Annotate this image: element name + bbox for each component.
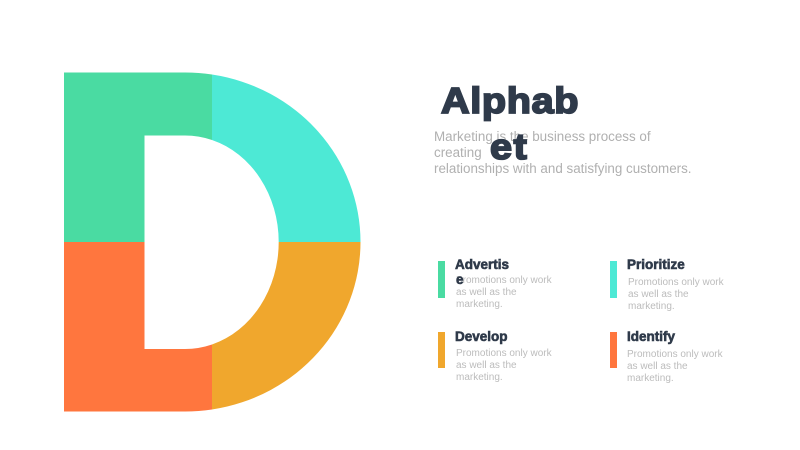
heading: Identify: [627, 329, 675, 344]
bar: green: [438, 261, 445, 298]
body text: relationships with and satisfying customers.: [434, 161, 692, 176]
segment: bottom left orange: [64, 242, 212, 412]
description: [456, 275, 552, 310]
description: as well as the: [627, 361, 688, 372]
heading: Advertis: [455, 257, 509, 272]
description: Promotions only work: [456, 275, 552, 286]
title: et: [490, 126, 529, 167]
item: Advertise: [438, 257, 552, 310]
description: [627, 349, 723, 384]
segment: top left green: [64, 72, 212, 242]
heading: e: [456, 272, 464, 287]
bar: teal: [610, 261, 617, 298]
description: as well as the: [456, 360, 517, 371]
title: Alphab: [441, 80, 579, 121]
item: Prioritize: [610, 257, 724, 312]
description: as well as the: [628, 289, 689, 300]
body text: [434, 129, 692, 176]
segment: bottom right yellow: [212, 242, 360, 410]
description: marketing.: [456, 299, 503, 310]
description: Promotions only work: [627, 349, 723, 360]
item: Identify: [610, 329, 723, 384]
description: marketing.: [627, 373, 674, 384]
body text: creating: [434, 145, 482, 160]
description: marketing.: [628, 301, 675, 312]
heading: [454, 257, 509, 287]
description: as well as the: [456, 287, 517, 298]
description: [628, 277, 724, 312]
item: Develop: [438, 329, 552, 383]
body text: Marketing is the business process of: [434, 129, 651, 144]
title: [440, 80, 579, 167]
bar: orange: [610, 332, 617, 368]
description: Promotions only work: [628, 277, 724, 288]
description: [456, 348, 552, 383]
bar: yellow: [438, 332, 445, 368]
description: marketing.: [456, 372, 503, 383]
heading: Develop: [455, 329, 508, 344]
segment: top right teal: [212, 74, 360, 242]
heading: Prioritize: [627, 257, 685, 272]
description: Promotions only work: [456, 348, 552, 359]
